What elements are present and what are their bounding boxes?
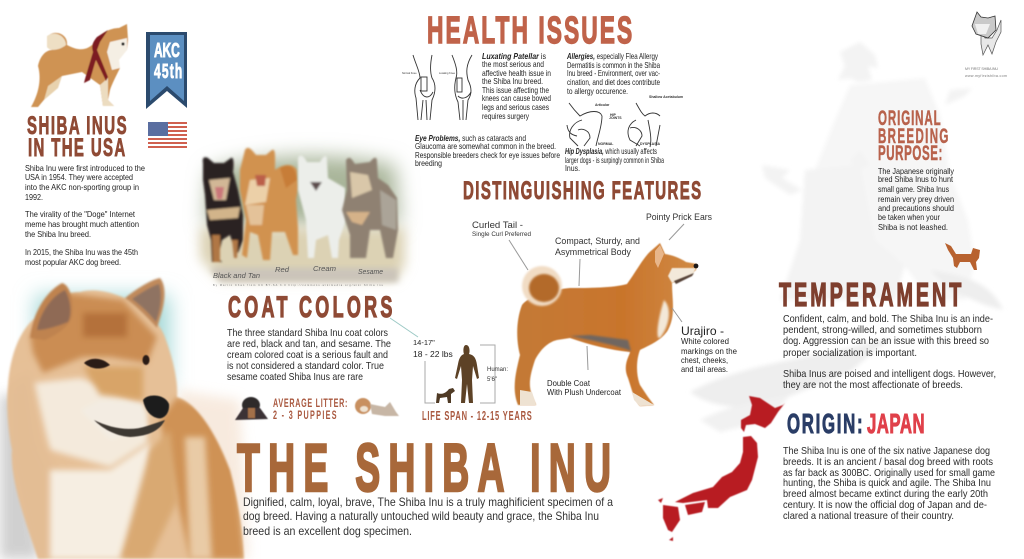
callout: urajiro: chest, cheeks, [681,355,728,365]
text: USA history: meme has brought much attention [25,219,139,229]
curled tail [522,266,562,306]
text: origin [783,445,995,522]
callout: double coat [547,378,622,397]
text: USA history [25,163,145,267]
background: pale Japanese scenery [690,42,1003,432]
text: coat colors: is not considered a standard color. True [227,360,384,372]
heading: Original Breeding Purpose: ORIGINAL [878,106,941,130]
callout: compact body: Compact, Sturdy, and [555,236,640,247]
callout: double coat: Double Coat [547,378,591,388]
text: breeding purpose: bred Shiba Inus to hunt [878,174,954,184]
text: coat colors: The three standard Shiba Inu coat colors [227,327,388,339]
text: Allergies: to allergy occurence. [567,86,628,96]
text: USA history: 1992. [25,192,43,202]
logo: My First Shiba Inu [965,12,1007,78]
heading: Temperament: TEMPERAMENT [779,276,962,313]
intro paragraph: dog breed. Having a naturally untouched wild beauty and grace, the Shiba Inu [243,509,599,523]
text: USA history: the Shiba Inu breed. [25,229,91,239]
text: USA history: The virality of the "Doge" Internet [25,209,136,219]
icon: black puppy [235,397,268,420]
badge text: 45th [154,61,182,83]
heading: Origin Japan: JAPAN [867,408,925,439]
hip labels: JOINTS [609,116,622,120]
heading: Origin Japan [787,408,925,439]
callout: urajiro: Urajiro - [681,324,724,338]
text: average litter: 2 - 3 PUPPIES [273,409,337,423]
text: coat colors [227,327,391,383]
text: Eye Problems [415,133,560,168]
ears [30,283,73,340]
panel: coat colors photo [200,148,405,287]
leader lines [509,224,684,370]
text: Luxating Patellar: the Shiba Inu breed. [482,76,543,86]
red dog [240,148,298,260]
text: Luxating Patellar: the most serious and [482,59,544,69]
text: Eye Problems: breeding [415,158,442,168]
photo credit: By Martin Chan from CC BY-SA 3.0 http://commons.wikimedia.org/wiki Shiba Inu [213,284,384,287]
icon: two puppies [355,398,399,416]
intro paragraph [243,495,613,538]
heading: Original Breeding Purpose [878,106,948,165]
text: Hip Dysplasia: Inus. [565,163,580,173]
coat color labels: Red [275,267,290,274]
shiba measurements [413,338,453,359]
heading: Origin Japan: ORIGIN: [787,408,863,439]
photo: large Shiba portrait [0,278,260,559]
hip labels: Articular [595,103,610,107]
cream dog [298,155,346,258]
heading: Shiba Inus in the USA: SHIBA INUS [27,112,127,140]
text: breeding purpose: remain very prey driven [878,194,954,204]
icon: human silhouette [455,345,479,403]
callout: urajiro: and tail areas. [681,364,728,374]
text: temperament: pendent, strong-willed, and sometimes stubborn [783,324,982,336]
coat color labels: Sesame [358,269,383,276]
text: breeding purpose: The Japanese originally [878,166,955,176]
face details [84,355,169,437]
text: coat colors: cream colored coat is a serious fault and [227,349,388,361]
human height label [487,367,508,383]
human height label: 5'6" [487,377,497,383]
knee labels [402,72,456,75]
heading: Original Breeding Purpose: PURPOSE: [878,141,942,165]
text: average litter [273,397,347,423]
diagram: Shiba anatomy with feature callouts [472,212,737,406]
size comparison [390,318,508,403]
text: origin: clared a national treasure of their country. [783,510,954,522]
text: temperament: they are not the most affectionate of breeds. [783,379,963,391]
text: Allergies [566,51,660,96]
logo: My First Shiba Inu: www.myfirstshiba.com [965,74,1007,78]
illustration: knee joints [402,55,472,120]
text: life span: LIFE SPAN - 12-15 YEARS [422,410,532,424]
illustration: hip joints [567,95,683,147]
text: Hip Dysplasia: larger dogs - is surpingly common in Shiba [565,155,664,165]
photo: standing Shiba [515,243,698,406]
illustrated Shiba with red ribbon [31,24,128,107]
text: temperament [783,313,996,391]
text: temperament: dog. Aggression can be an issue with this breed so [783,335,989,347]
callout: curled tail: Curled Tail - [472,220,523,231]
callout: compact body [555,236,640,258]
main title: THE SHIBA INU [237,429,611,506]
text: breeding purpose: small game. Shiba Inus [878,184,949,194]
hip labels: HIP [610,113,616,117]
heading: Shiba Inus in the USA [27,112,127,162]
text: breeding purpose: be taken when your [878,212,940,222]
text: Luxating Patellar [482,51,551,121]
coat color labels [213,266,383,280]
text: USA history: most popular AKC dog breed. [25,257,121,267]
badge text: AKC [154,40,180,62]
callout: urajiro: markings on the [681,346,737,356]
callout: double coat: With Plush Undercoat [547,387,622,397]
text: coat colors: are red, black and tan, and sesame. The [227,338,391,350]
text: Luxating Patellar: affective health issue in [482,68,551,78]
text: temperament: Confident, calm, and bold. The Shiba Inu is an inde- [783,313,993,325]
text: Luxating Patellar: requires surgery [482,111,530,121]
AKC ribbon badge [146,32,187,109]
shiba measurements: 18 - 22 lbs [413,349,453,359]
black and tan dog [203,157,243,262]
icon: US flag [148,122,187,148]
text: average litter: AVERAGE LITTER: [273,397,347,411]
text: USA history: USA in 1954. They were accepted [25,172,133,182]
heading: Health Issues: HEALTH ISSUES [427,9,632,51]
hip labels [595,95,683,146]
text: Eye Problems: Eye Problems, such as cataracts and [415,133,526,143]
knee labels: Luxating Knee [439,72,456,75]
text: breeding purpose: Shiba is not leashed. [878,222,948,232]
text: USA history: Shiba Inu were first introduced to the [25,163,145,173]
callout: curled tail: Single Curl Preferred [472,231,531,238]
text: origin: century. It is now the official dog of Japan and de- [783,499,987,511]
callout: curled tail [472,220,531,238]
coat color labels: Cream [313,266,336,273]
knee labels: Normal Knee [402,72,417,75]
text: Hip Dysplasia: Hip Dysplasia, which usually affects [565,146,657,156]
text: Allergies: cination, and diet does contribute [567,77,660,87]
text: Luxating Patellar: knees can cause bowed [482,93,551,103]
text: Allergies: Inu breed - Environment, over vac- [567,68,660,78]
map: Japan [658,396,785,541]
heading: Distinguishing Features: DISTINGUISHING FEATURES [463,177,701,205]
coat color labels: Black and Tan [213,273,260,280]
text: coat colors: sesame coated Shiba Inus are rare [227,371,363,383]
icon: small orange dog [945,243,980,270]
shiba measurements: 14-17" [413,338,435,347]
text: breeding purpose [878,166,955,232]
text: Luxating Patellar: This issue affecting the [482,85,549,95]
callout: compact body: Asymmetrical Body [555,247,631,258]
text: breeding purpose: and precautions should [878,203,954,213]
callout: urajiro: White colored [681,336,729,346]
heading: Original Breeding Purpose: BREEDING [878,124,948,148]
text: Luxating Patellar: Luxating Patellar is [482,51,546,61]
logo: My First Shiba Inu: MY FIRST SHIBA INU [965,67,998,71]
hip labels: DYSPLASIA [640,142,661,146]
text: origin: as far back as 300BC. Originally used for small game [783,467,995,479]
hip labels: Shallow Acetabulum [649,95,683,99]
hip labels: NORMAL [598,142,614,146]
sesame dog [342,158,398,258]
text: temperament: proper socialization is important. [783,347,917,359]
text: origin: breeds. It is an ancient / basal dog breed with roots [783,456,993,468]
text: temperament: Shiba Inus are poised and intelligent dogs. However, [783,368,996,380]
callout: ears: Pointy Prick Ears [646,212,712,223]
text: origin: The Shiba Inu is one of the six native Japanese dog [783,445,990,457]
text: Eye Problems: Responsible breeders check for eye issues before [415,150,560,160]
heading: Shiba Inus in the USA: IN THE USA [28,134,125,162]
callout: urajiro [681,324,737,374]
text: Allergies: Allergies, especially Flea Allergy [566,51,659,61]
text: USA history: In 2015, the Shiba Inu was the 45th [25,247,138,257]
badge text [154,40,182,83]
text: Hip Dysplasia [565,146,664,173]
human height label: Human: [487,367,508,373]
text: origin: breed almost became extinct during the early 20th [783,488,988,500]
icon: dog silhouette [436,388,455,403]
text: Luxating Patellar: legs and serious cases [482,102,549,112]
text: Allergies: Dermatitis is common in the Shiba [567,60,660,70]
heading: Coat Colors: COAT COLORS [228,292,392,324]
text: origin: hunting, the Shiba is quick and agile. The Shiba Inu [783,477,991,489]
text: USA history: into the AKC non-sporting group in [25,182,139,192]
text: Eye Problems: Glaucoma are somewhat common in the breed. [415,141,556,151]
intro paragraph: breed is an excellent dog specimen. [243,524,412,538]
intro paragraph: Dignified, calm, loyal, brave, The Shiba Inu is a truly maghificient specimen of a [243,495,613,509]
